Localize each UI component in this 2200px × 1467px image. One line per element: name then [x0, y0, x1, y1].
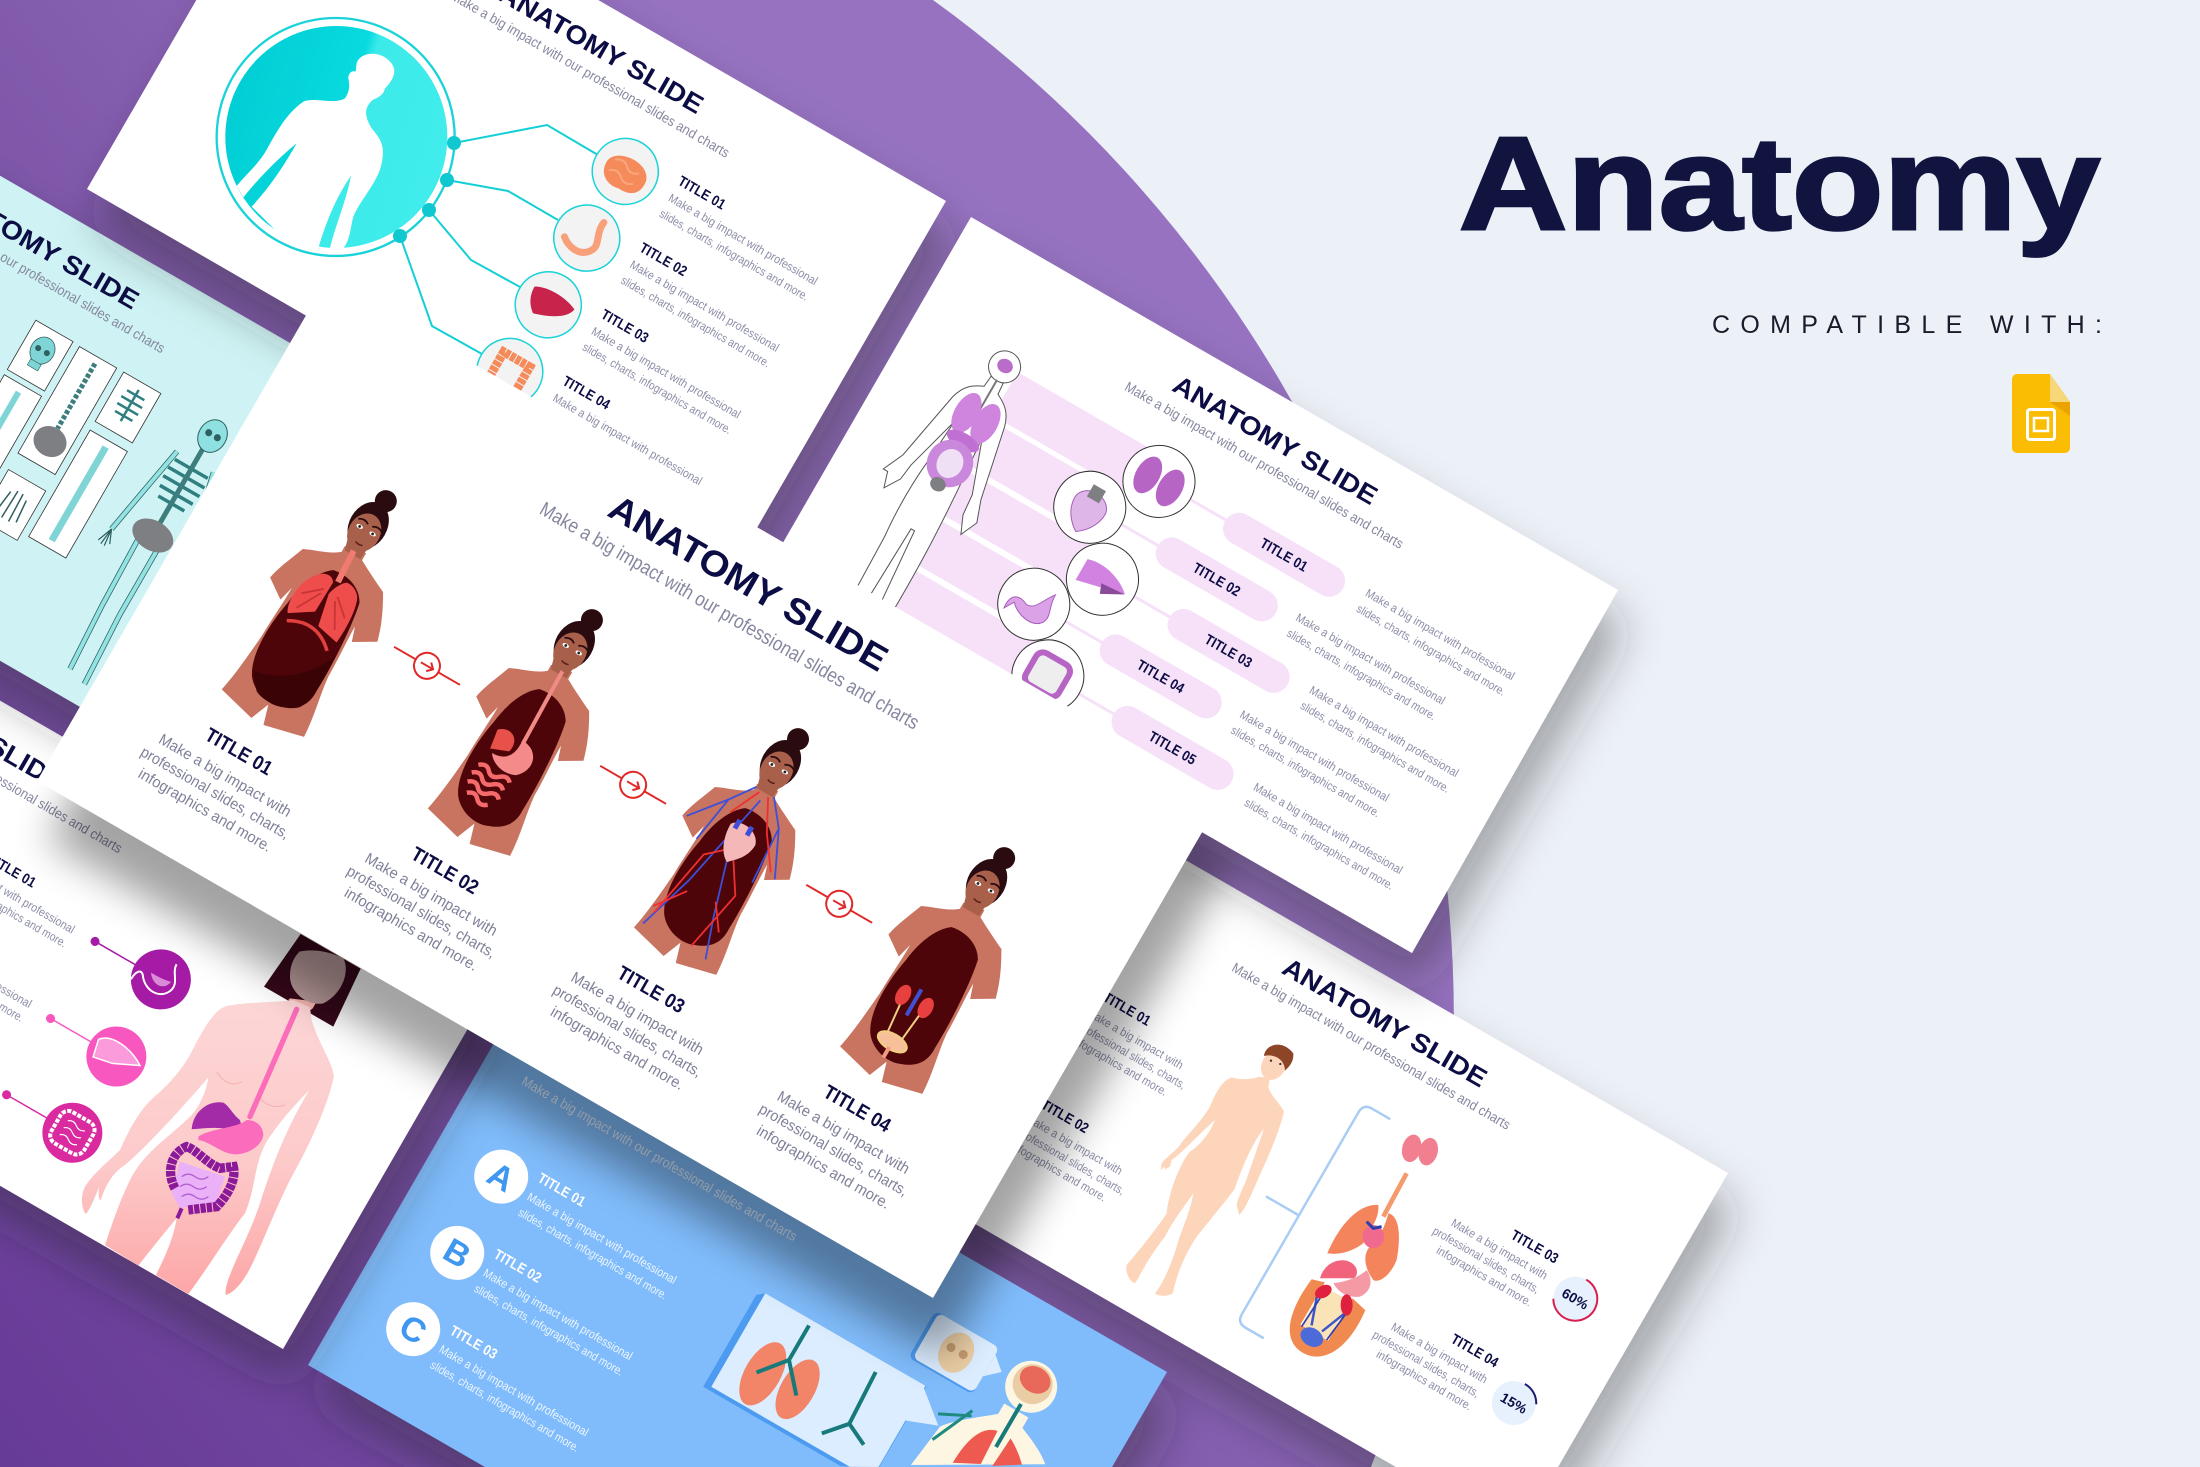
text block: description 4: slides, charts, infographics and more.: [1228, 723, 1383, 820]
heading: ANATOMY SLIDE: [1277, 952, 1492, 1093]
text block: title 02: [333, 819, 523, 979]
text block: title 04: TITLE 04: [559, 374, 612, 413]
list item C: [376, 1292, 603, 1455]
text block: title 04: [746, 1057, 936, 1217]
text block: title 02: Make a big impact with: [1024, 1111, 1125, 1178]
slide background: [87, 0, 946, 564]
pill: title 05: TITLE 05: [1146, 729, 1199, 769]
slide background: [308, 999, 1167, 1467]
icon: stomach circle: [985, 555, 1083, 653]
heading: ANATOMY SLIDE: [1168, 369, 1383, 511]
panel: blue slide with lettered list: [308, 999, 1167, 1467]
text block: description 4: Make a big impact with professional: [1237, 707, 1392, 805]
slide content: [794, 265, 1564, 948]
card: skull: [7, 320, 73, 391]
text block: title 01: Make a big impact with: [156, 731, 294, 821]
arrow 2: [594, 755, 673, 815]
panel: main slide with four torsos: [37, 279, 1223, 1298]
upper organs column: [1302, 1132, 1441, 1340]
panel: slide bottom right with body and percentages: [868, 798, 1728, 1467]
line-art body: [794, 326, 1059, 677]
panel: top teal body slide: [87, 0, 946, 564]
list item B: slides, charts, infographics and more.: [472, 1281, 626, 1379]
connector dots: [393, 136, 461, 243]
slide content: left column: [991, 878, 1530, 1392]
text block: title 04: professional slides, charts,: [1370, 1328, 1482, 1400]
text block: title 01: professional slides, charts,: [137, 744, 292, 843]
icon: intestines circle: [999, 627, 1097, 725]
text block: title 02: [0, 984, 32, 1022]
text block: title 04: TITLE 04: [819, 1081, 895, 1138]
slide background: [0, 610, 493, 1349]
list item A: A: [481, 1155, 521, 1200]
text block: title 01: [127, 700, 317, 860]
slide content: right column: [1363, 1193, 1610, 1442]
card: hand: [0, 470, 46, 540]
text block: title 02: slides, charts, infographics and more.: [618, 273, 773, 370]
text block: description 1: Make a big impact with professional: [1363, 586, 1517, 683]
person body with organs: [911, 1404, 1045, 1466]
bracket connector: [1204, 1085, 1390, 1338]
card: spine and pelvis: [18, 347, 117, 475]
panel: teal skeleton slide: [0, 22, 382, 760]
icon: stomach circle: [90, 936, 191, 1010]
slide background: [868, 798, 1728, 1467]
text block: title 03: slides, charts, infographics and more.: [580, 340, 734, 437]
text block: title 04: professional slides, charts,: [756, 1101, 911, 1200]
text block: title 01: professional slides, charts,: [1077, 1019, 1188, 1092]
text block: title 01: slides, charts, infographics and more.: [657, 206, 811, 304]
text block: title 03: TITLE 03: [1508, 1228, 1561, 1267]
text block: title 02: professional slides, charts,: [1016, 1125, 1127, 1198]
donut 60 percent: [1545, 1269, 1605, 1329]
pill: title 04: [1094, 629, 1228, 724]
figure 4: urinary: [823, 818, 1064, 1110]
bubble: skull: [908, 1311, 1012, 1401]
icon: brain circle: [1110, 432, 1208, 531]
text block: title 02: [1008, 1094, 1145, 1211]
panel: left slide with digestive system: [0, 610, 493, 1349]
main slide cast shadow: [32, 788, 1241, 1372]
text block: title 03: professional slides, charts,: [1430, 1224, 1542, 1296]
donut 60 percent: 60%: [1559, 1285, 1592, 1313]
compatible with label: COMPATIBLE WITH:: [1712, 311, 2102, 339]
text block: description 5: slides, charts, infographics and more.: [1242, 796, 1396, 893]
text block: description 1: slides, charts, infographics and more.: [1354, 602, 1508, 699]
pill: title 01: [1217, 507, 1351, 603]
list item A: TITLE 01: [535, 1171, 588, 1211]
skeleton figure: [32, 398, 257, 699]
text block: description 3: Make a big impact with professional: [1307, 683, 1461, 780]
text block: title 03: infographics and more.: [547, 1004, 687, 1094]
text block: title 03: Make a big impact with: [568, 969, 706, 1059]
pill: title 03: TITLE 03: [1202, 632, 1255, 672]
list item C: TITLE 03: [447, 1323, 500, 1363]
subheading: Make a big impact with our professional slides and charts: [1229, 959, 1513, 1133]
icon: liver: [503, 260, 593, 350]
connector lines: [400, 125, 598, 354]
text block: title 03: [540, 938, 729, 1098]
slide background: [37, 279, 1223, 1298]
lower organs: colon and bladder: [1277, 1275, 1368, 1370]
slide content: [0, 153, 295, 699]
pill: title 01: TITLE 01: [1257, 536, 1310, 576]
text block: title 01: [1069, 987, 1207, 1105]
text block: title 04: Make a big impact with: [1389, 1320, 1490, 1386]
text block: title 03: [1423, 1193, 1561, 1310]
icon: heart circle: [1041, 458, 1139, 556]
list item A: [464, 1140, 691, 1302]
person head: [996, 1351, 1067, 1422]
text block: title 04: Make a big impact with: [774, 1088, 912, 1178]
text block: title 03: Make a big impact with professional: [589, 324, 743, 421]
text block: title 01: infographics and more.: [1069, 1033, 1170, 1099]
text block: title 02: Make a big impact with: [362, 850, 500, 940]
icon: liver circle: [46, 1014, 146, 1086]
bubble: lungs and trachea: [703, 1293, 938, 1467]
subheading: Make a big impact with our professional slides and charts: [1122, 378, 1406, 552]
text block: description 5: Make a big impact with professional: [1251, 780, 1405, 877]
figure 3: circulatory: [617, 699, 858, 991]
donut 15 percent: 15%: [1498, 1389, 1531, 1417]
list item B: [420, 1216, 647, 1379]
text block: title 04: [1363, 1296, 1501, 1414]
text block: title 01: TITLE 01: [675, 174, 728, 213]
list item C: C: [393, 1307, 433, 1353]
slide content: [127, 344, 1141, 1217]
body silhouette circle: [217, 18, 455, 256]
list item A: Make a big impact with professional: [525, 1190, 679, 1287]
text block: title 02: infographics and more.: [1008, 1138, 1109, 1204]
slide background: [762, 217, 1618, 953]
arrow 1: [388, 636, 466, 696]
slide background: [0, 22, 382, 760]
pill: title 02: [1150, 532, 1284, 627]
arrow 3: [800, 874, 879, 934]
donut 15 percent: [1484, 1373, 1544, 1433]
panel: pink organs slide: [762, 217, 1618, 953]
list item C: slides, charts, infographics and more.: [428, 1358, 582, 1455]
subheading: Make a big impact with our professional slides and charts: [519, 1073, 800, 1244]
figure 2: digestive: [411, 580, 652, 872]
text block: title 01: [0, 858, 76, 948]
text block: title 03: TITLE 03: [613, 962, 688, 1018]
slide content: skull bubble and person head: [908, 1304, 1067, 1431]
human body figure: [1126, 1045, 1293, 1296]
slide content: [287, 0, 871, 511]
slide content: subheading and list: [374, 1073, 800, 1467]
icon: liver circle: [1053, 530, 1152, 628]
text block: description 2: slides, charts, infographics and more.: [1284, 626, 1439, 723]
text block: title 01: Make a big impact with: [1085, 1006, 1186, 1072]
slide content: [0, 738, 191, 1163]
text block: title 01: Make a big impact with professional: [666, 191, 820, 288]
text block: title 01: TITLE 01: [1100, 990, 1153, 1030]
pill: title 05: [1106, 700, 1239, 796]
text block: description 2: Make a big impact with professional: [1293, 610, 1448, 708]
card: ribcage: [95, 372, 161, 443]
text block: title 01: TITLE 01: [201, 724, 276, 780]
female body illustration: [82, 934, 361, 1295]
list item B: B: [437, 1231, 477, 1276]
icon: google slides: [2012, 374, 2070, 453]
text block: title 04: TITLE 04: [1448, 1331, 1501, 1371]
list item B: Make a big impact with professional: [481, 1266, 635, 1363]
text block: title 04: infographics and more.: [754, 1123, 893, 1213]
text block: title 02: TITLE 02: [1038, 1097, 1091, 1137]
text block: description 3: slides, charts, infographics and more.: [1298, 699, 1452, 796]
title: Anatomy: [1459, 110, 2100, 257]
text block: title 04: infographics and more.: [1374, 1347, 1475, 1413]
text block: title 02: TITLE 02: [636, 240, 689, 280]
text block: title 03: infographics and more.: [1434, 1243, 1535, 1309]
pill: title 03: [1162, 603, 1295, 699]
list item C: Make a big impact with professional: [437, 1342, 591, 1439]
icon: brain: [580, 126, 670, 216]
text block: title 04: Make a big impact with professional: [550, 391, 705, 488]
text block: title 02: TITLE 02: [407, 843, 482, 899]
subheading: Make a big impact with our professional slides and charts: [536, 498, 923, 734]
pill: title 02: TITLE 02: [1190, 560, 1243, 600]
card: long bone: [0, 375, 42, 503]
text block: title 01: infographics and more.: [135, 766, 274, 856]
heading: ANATOMY SLIDE: [602, 486, 895, 679]
text block: title 02: Make a big impact with professional: [627, 258, 782, 355]
figure 1: lungs: [205, 461, 446, 753]
text block: title 03: TITLE 03: [598, 307, 651, 347]
icon: intestines circle: [2, 1090, 102, 1163]
icon: stomach: [542, 193, 632, 283]
purple circle backdrop: [0, 0, 1454, 1467]
icon: intestines: [465, 326, 555, 417]
list item B: TITLE 02: [491, 1247, 544, 1287]
pill: title 04: TITLE 04: [1134, 657, 1187, 697]
text block: title 02: professional slides, charts,: [343, 863, 498, 962]
pink bands: [881, 372, 1262, 750]
text block: title 03: Make a big impact with: [1449, 1216, 1550, 1282]
text block: title 03: professional slides, charts,: [550, 982, 704, 1081]
text block: title 02: infographics and more.: [341, 885, 481, 975]
list item A: slides, charts, infographics and more.: [516, 1205, 670, 1302]
card: leg bone: [29, 430, 127, 558]
